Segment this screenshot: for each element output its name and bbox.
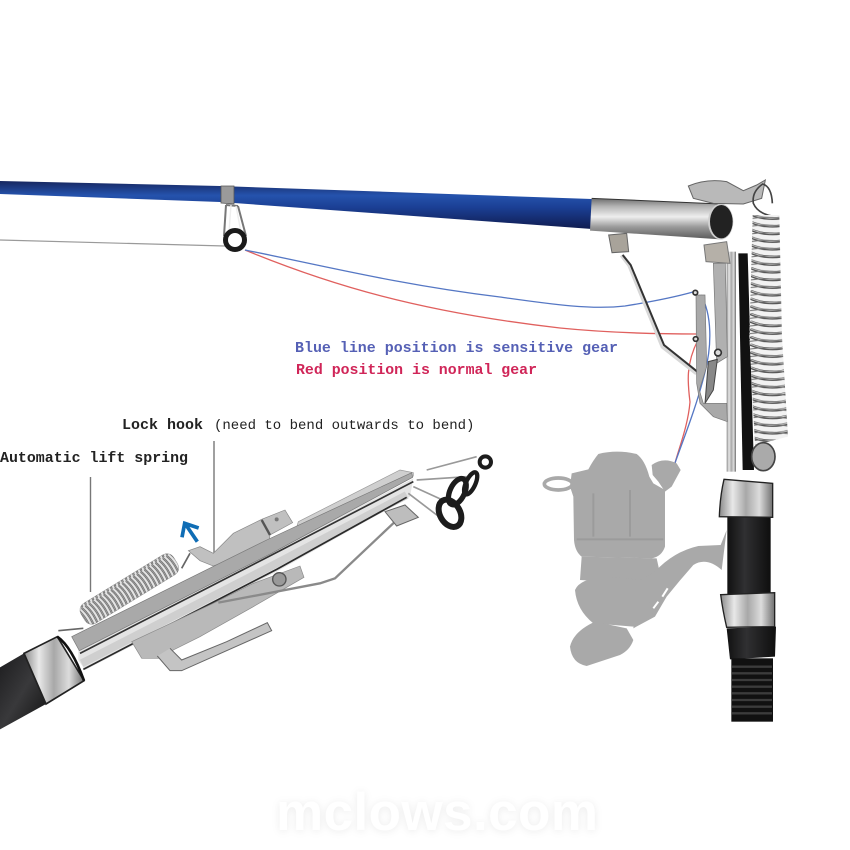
deployed release mechanism [590, 180, 788, 472]
steel ferrule [24, 637, 84, 704]
handle grip [727, 515, 771, 597]
reel body [570, 452, 665, 558]
gear plate [696, 295, 727, 422]
left bracket [609, 233, 629, 253]
top latch [688, 180, 765, 204]
text: blue line label: Blue line position is sensitive gear [295, 340, 618, 357]
red line: normal gear [245, 250, 698, 463]
reel handle knob [570, 622, 633, 666]
line guide ring [224, 205, 246, 250]
rod underlay [78, 478, 413, 670]
top long plate [293, 470, 413, 538]
blue arrow [182, 523, 199, 542]
right rod handle [719, 479, 776, 722]
pivot [273, 573, 286, 586]
reel bail [544, 478, 572, 490]
reel foot arm [633, 530, 727, 628]
main coil spring [749, 215, 788, 445]
watermark: mclows.com [276, 783, 598, 842]
spring [58, 551, 190, 631]
gear pins [693, 290, 721, 356]
text: automatic lift spring label: Automatic lift spring [0, 450, 188, 467]
lower lever [157, 623, 272, 671]
steel pole [727, 252, 754, 472]
lock hook plate [188, 510, 293, 566]
lower ferrule [721, 593, 775, 627]
upper ferrule [719, 479, 773, 517]
threaded end [731, 658, 773, 722]
butt cap [727, 627, 776, 659]
second rod [82, 495, 407, 663]
leader line: lift spring [90, 477, 92, 592]
blue fishing rod [0, 181, 592, 229]
text: lock hook label: Lock hook [122, 417, 203, 434]
rod holder sleeve [590, 198, 733, 240]
leader line: lock hook [213, 441, 215, 560]
reel neck [580, 557, 660, 583]
bent support wire [622, 255, 697, 373]
rod collar [221, 186, 234, 204]
spring end loop [752, 443, 775, 471]
folded telescopic rod mechanism [0, 456, 491, 729]
bent wire [218, 522, 395, 603]
latch wire hook [753, 184, 777, 217]
fishing line entering guide [0, 240, 225, 246]
right bracket and arm [704, 242, 730, 363]
reel lower body [575, 577, 653, 627]
lower plate [132, 566, 304, 658]
lever [705, 359, 717, 403]
blue line: sensitive gear [245, 250, 710, 463]
line roller knob [652, 460, 681, 492]
wire clip [385, 505, 418, 526]
bar dark line [80, 482, 413, 653]
black grip [0, 653, 46, 729]
main steel bar [72, 473, 413, 651]
text: red line label: Red position is normal gear [296, 362, 537, 379]
spinning reel silhouette [544, 452, 727, 666]
text: lock hook label: (need to bend outwards to bend) [214, 418, 474, 434]
slits [550, 483, 668, 608]
guide rings [408, 456, 491, 531]
